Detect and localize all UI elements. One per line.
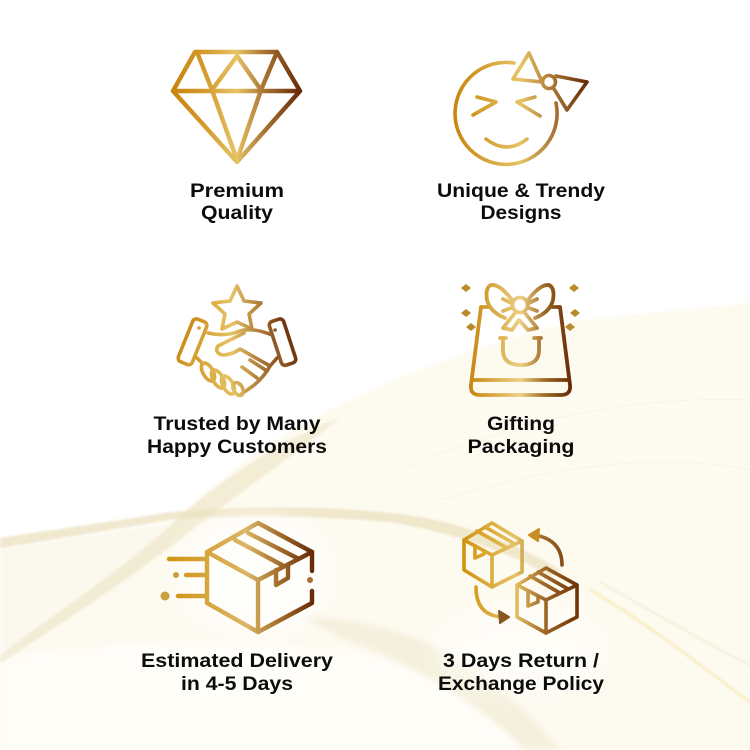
label: trusted by many happy customers: Happy Customers [147,437,327,458]
background: golden silk waves [0,303,750,750]
label: unique and trendy designs [437,181,605,224]
icon: gift bag with bow [471,285,570,395]
icon: sparkles [461,284,580,331]
label: estimated delivery: Estimated Delivery [141,651,333,672]
label: premium quality: Quality [201,203,273,224]
label: unique and trendy designs: Designs [480,203,562,224]
label: premium quality [190,181,284,224]
feature: unique and trendy designs [437,53,605,224]
feature: trusted by many happy customers [147,286,327,458]
label: premium quality: Premium [190,181,284,202]
label: gifting packaging: Packaging [468,437,574,458]
icon: handshake with star [177,286,297,397]
icon: winking face with bow [455,53,587,164]
feature: return or exchange [438,523,604,695]
icon: motion dots [160,572,313,600]
feature: estimated delivery [141,523,333,695]
icon: moving parcel [169,523,312,632]
label: return or exchange [438,651,604,695]
label: gifting packaging [468,414,574,458]
feature: gifting packaging [461,284,580,458]
label: return or exchange: Exchange Policy [438,674,604,695]
icon: return arrowheads [499,529,539,623]
icon: diamond [173,52,300,162]
label: gifting packaging: Gifting [487,414,555,435]
label: trusted by many happy customers: Trusted by Many [154,414,321,435]
label: return or exchange: 3 Days Return / [443,651,600,672]
icon: parcel swap [464,523,577,633]
label: estimated delivery: in 4-5 Days [181,674,293,695]
label: trusted by many happy customers [147,414,327,458]
label: unique and trendy designs: Unique & Trendy [437,181,605,202]
feature: premium quality [173,52,300,224]
label: estimated delivery [141,651,333,695]
